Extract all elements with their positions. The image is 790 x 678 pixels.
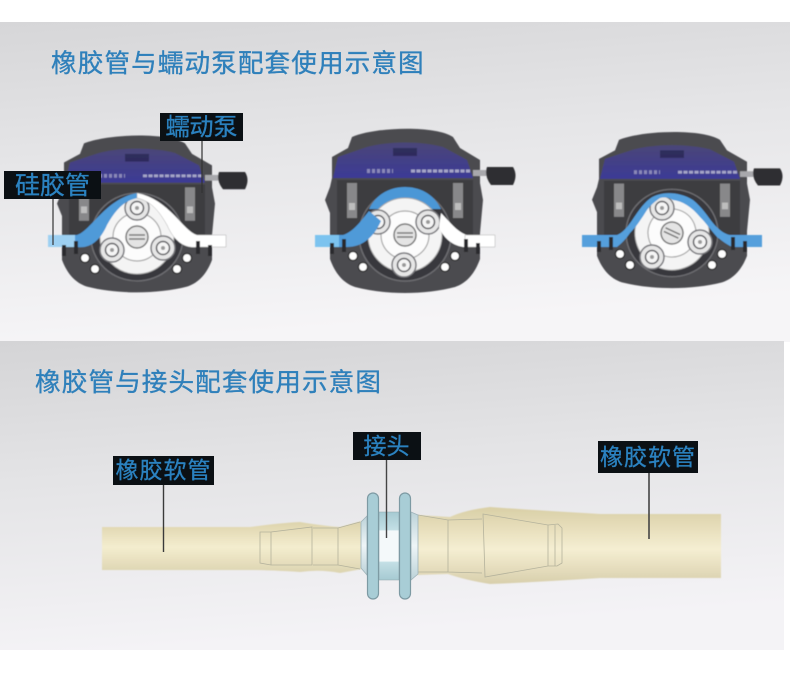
connector assembly (102, 493, 721, 599)
barb outlines (260, 514, 562, 577)
label: right hose (598, 441, 698, 539)
label: connector: 接头 (364, 433, 410, 459)
title: tube and pump: 橡胶管与蠕动泵配套使用示意图 (51, 49, 425, 78)
label: connector (353, 432, 421, 538)
title: tube and connector: 橡胶管与接头配套使用示意图 (35, 368, 382, 397)
right flange (400, 493, 410, 599)
left rubber hose (102, 521, 362, 573)
left flange (368, 493, 378, 599)
pump diagram 1 (48, 136, 248, 292)
label: peristaltic pump: 蠕动泵 (166, 114, 238, 141)
label: right hose: 橡胶软管 (600, 444, 696, 470)
label: silicone tube (4, 171, 101, 245)
pump diagram 3 (582, 132, 782, 288)
pump diagram 2 (315, 129, 516, 293)
right rubber hose (417, 507, 721, 584)
label: left hose (113, 456, 214, 552)
label: silicone tube: 硅胶管 (15, 172, 90, 200)
label: left hose: 橡胶软管 (116, 457, 212, 483)
connector cylinder (379, 512, 399, 580)
panel: peristaltic pump background (0, 22, 790, 342)
label: peristaltic pump (160, 113, 243, 193)
connector cones (361, 516, 367, 575)
panel: connector background (0, 341, 784, 650)
